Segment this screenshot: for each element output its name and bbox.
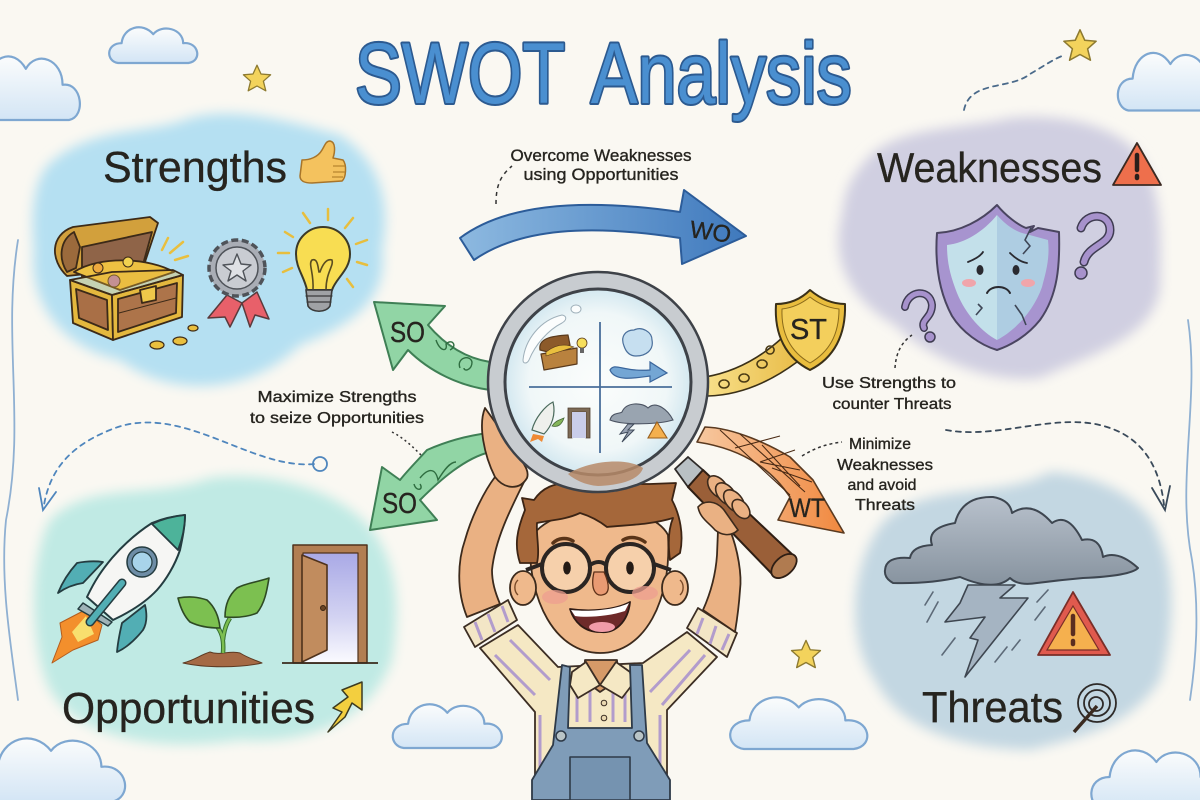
ST label: ST <box>790 314 827 346</box>
head <box>510 509 688 653</box>
right hand gripping handle <box>698 472 753 535</box>
weaknesses heading: Weaknesses <box>877 144 1102 191</box>
annotation: WO text <box>496 147 692 204</box>
character: child <box>459 408 741 800</box>
icon: warning triangle <box>1113 143 1161 185</box>
annotation: WO text: Overcome Weaknesses <box>510 147 692 165</box>
lens <box>496 280 700 484</box>
annotation: SO text <box>250 389 424 456</box>
icon: storm cloud <box>885 497 1138 677</box>
weaknesses wash <box>839 117 1161 379</box>
icon: question marks <box>905 216 1110 342</box>
hair <box>517 483 682 563</box>
icon: ST shield <box>776 290 845 370</box>
arrow: ST <box>705 290 845 396</box>
annotation: ST text: Use Strengths to <box>822 375 956 392</box>
decorative stars <box>243 30 1096 668</box>
shirt and overalls <box>464 600 737 800</box>
icon: sprout <box>178 578 269 667</box>
opportunities heading: Opportunities <box>62 684 315 733</box>
hair seen through lens <box>568 461 643 486</box>
annotation: WT text <box>802 436 933 514</box>
handle <box>675 457 801 583</box>
icon: rocket <box>52 515 185 663</box>
mini door <box>568 408 590 438</box>
mini cloud <box>623 329 652 356</box>
SO label: SO <box>382 488 417 520</box>
icon: treasure chest <box>55 217 198 349</box>
icon: up arrow <box>328 682 362 732</box>
mouth <box>570 602 630 632</box>
mini rocket <box>530 402 564 442</box>
SO label: SO <box>390 317 425 349</box>
mini arrow <box>610 362 667 382</box>
lens cross <box>529 322 672 453</box>
WO label: WO <box>688 216 733 249</box>
threats wash <box>855 472 1171 750</box>
panel: strengths <box>33 114 385 386</box>
arrow: WO <box>460 190 746 264</box>
nose and cheeks <box>542 572 658 604</box>
annotation: WT text: Threats <box>855 497 915 514</box>
threats heading: Threats <box>922 683 1063 732</box>
annotation: WT text: and avoid <box>848 477 916 494</box>
panel: threats <box>855 472 1171 750</box>
title: SWOT Analysis <box>355 25 852 122</box>
annotation: WT text: Weaknesses <box>837 457 933 474</box>
icon: medal <box>208 240 269 327</box>
panel: opportunities <box>34 476 396 744</box>
icon: open door <box>282 545 378 663</box>
glasses <box>526 544 671 592</box>
strengths heading: Strengths <box>103 143 287 192</box>
strengths wash <box>33 114 385 386</box>
WT label: WT <box>789 493 825 523</box>
icon: light bulb <box>278 209 367 311</box>
annotation: SO text: Maximize Strengths <box>258 389 417 406</box>
left hand <box>482 408 528 487</box>
icon: target <box>1074 684 1116 732</box>
annotation: WO text: using Opportunities <box>524 166 678 184</box>
mini storm <box>610 404 673 442</box>
annotation: ST text: counter Threats <box>832 396 952 413</box>
arrow: WT <box>697 427 844 533</box>
lens highlight <box>523 305 581 363</box>
eyebrows <box>553 538 645 543</box>
magnifying glass <box>488 272 801 583</box>
icon: thumbs up <box>300 141 346 183</box>
annotation: ST text <box>822 335 956 413</box>
decorative dashed swirl lines <box>44 56 1164 505</box>
opportunities wash <box>34 476 396 744</box>
panel: weaknesses <box>839 117 1161 379</box>
mini chest <box>540 335 587 370</box>
arrow: SO lower <box>370 433 490 530</box>
eyes <box>563 562 634 574</box>
arrow: SO upper <box>374 302 490 390</box>
annotation: SO text: to seize Opportunities <box>250 410 424 427</box>
arms <box>459 477 525 617</box>
icon: warning sign <box>1038 592 1110 655</box>
icon: cracked shield <box>936 205 1059 350</box>
annotation: WT text: Minimize <box>849 436 911 453</box>
